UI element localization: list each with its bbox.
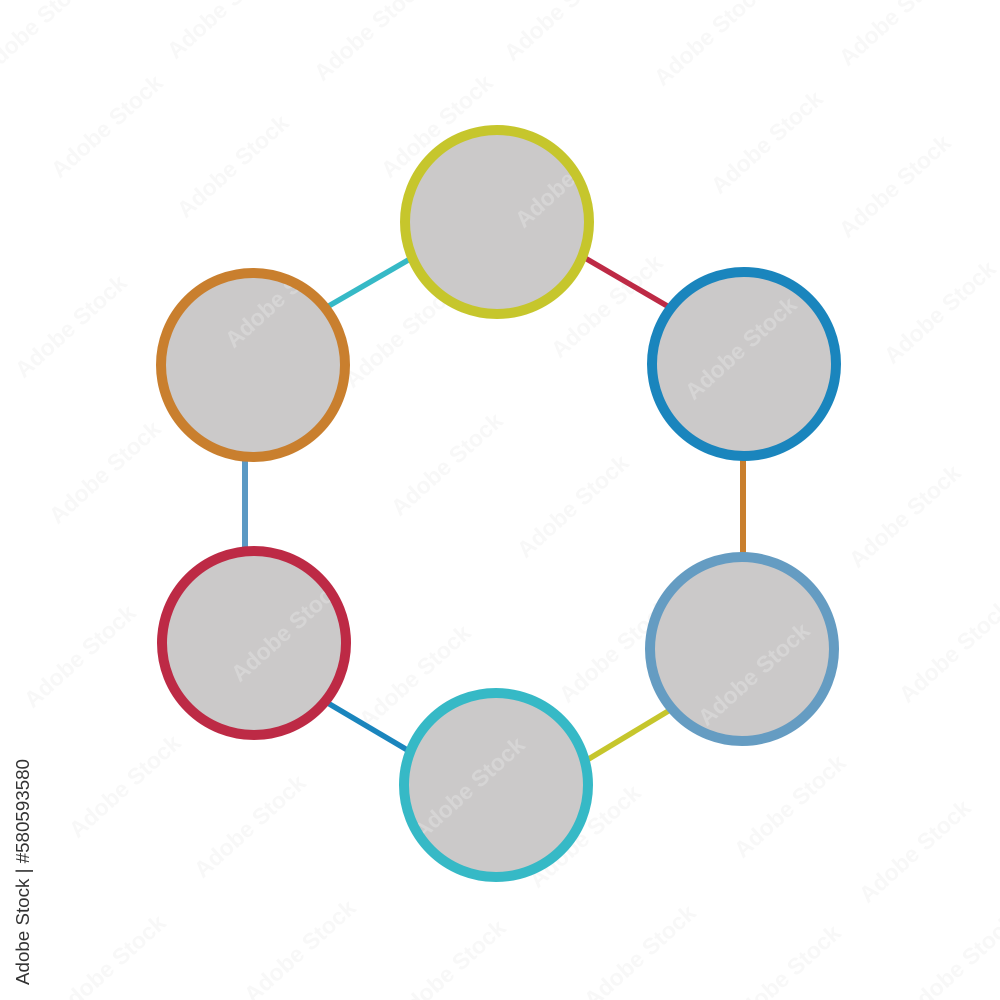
cycle diagram: Adobe Stock [354,619,476,733]
cycle diagram: Adobe Stock [512,449,634,563]
cycle diagram: Adobe Stock [546,249,668,363]
node: teal circle [404,693,588,877]
cycle diagram: Adobe Stock [524,779,646,893]
cycle diagram: Adobe Stock [706,85,828,199]
cycle diagram: Adobe Stock [46,69,168,183]
cycle diagram: Adobe Stock [680,291,802,405]
cycle diagram: Adobe Stock [729,749,851,863]
cycle diagram: Adobe Stock [64,729,186,843]
cycle diagram: Adobe Stock [220,239,342,353]
node: light blue circle [650,557,834,741]
cycle diagram: Adobe Stock [10,269,132,383]
connector: blue to light blue (orange) [740,458,746,555]
connector: red to orange (steel blue) [242,459,248,550]
cycle diagram: Adobe Stock [226,573,348,687]
cycle diagram: Adobe Stock [44,415,166,529]
cycle diagram: Adobe Stock [879,255,1000,369]
cycle diagram: Adobe Stock [854,794,976,908]
connector: light blue to teal (yellow) [587,710,670,760]
cycle diagram: Adobe Stock [339,279,461,393]
cycle diagram: Adobe Stock [408,731,530,845]
connector: teal to red (blue) [326,702,409,751]
connector: orange to yellow (teal) [327,259,410,307]
node: blue circle [652,272,836,456]
cycle diagram: Adobe Stock [554,594,676,708]
node: red circle [162,551,346,735]
cycle diagram [16,125,841,985]
cycle diagram: Adobe Stock [19,599,141,713]
cycle diagram: Adobe Stock [844,459,966,573]
node: yellow circle [405,130,589,314]
connector: yellow to blue (red) [585,258,669,307]
node: orange circle [161,273,345,457]
cycle diagram: Adobe Stock [386,407,508,521]
cycle diagram: Adobe Stock [834,129,956,243]
cycle diagram: Adobe Stock [189,769,311,883]
stock credit text: Adobe Stock | #580593580 [13,759,33,985]
cycle diagram: Adobe Stock [172,109,294,223]
cycle diagram: Adobe Stock [510,119,632,233]
cycle diagram: Adobe Stock [376,69,498,183]
cycle diagram: Adobe Stock [693,617,815,731]
